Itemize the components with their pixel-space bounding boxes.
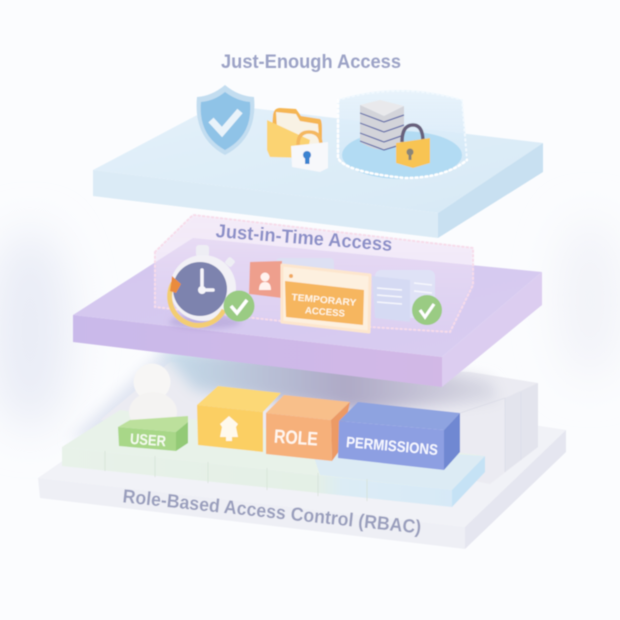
panel: role-based access control layer (38, 350, 566, 549)
icon: white lock (291, 132, 328, 172)
block: orange role (266, 395, 350, 461)
label: just-in-time access: Just-in-Time Access (215, 221, 393, 256)
label: access: ACCESS (304, 305, 345, 320)
blue slab (93, 104, 543, 238)
block: yellow role block (197, 386, 281, 452)
purple slab (73, 238, 542, 387)
label: temporary: TEMPORARY (291, 292, 357, 309)
icon: stopwatch (169, 245, 241, 329)
icon: server stack (360, 100, 404, 150)
icon: folder (267, 108, 322, 160)
label: just-enough access: Just-Enough Access (221, 52, 401, 73)
panel: just-in-time access layer (73, 215, 542, 387)
icon: shield (197, 85, 254, 155)
label: role-based access control: Role-Based Access Control (RBAC) (122, 486, 422, 539)
icon: user card (249, 258, 334, 298)
icon: gold lock (396, 125, 430, 168)
icon: documents (372, 270, 435, 322)
dotted boundary (155, 215, 473, 332)
label: role: ROLE (273, 426, 319, 451)
icon: database zone (337, 90, 468, 179)
user figure and block (118, 364, 188, 451)
floor blocks (62, 362, 538, 507)
icon: green check (412, 295, 442, 325)
label: user: USER (129, 431, 167, 450)
block: permissions (338, 402, 460, 470)
icon: house (220, 416, 238, 441)
card: temporary access (282, 265, 370, 332)
glow box (155, 215, 473, 332)
shadow under middle layer (160, 350, 500, 412)
icon: user figure (129, 364, 177, 432)
label: permissions: PERMISSIONS (345, 434, 439, 459)
panel: just-enough access layer (93, 52, 543, 238)
base slab (38, 372, 566, 549)
icon: green check (224, 290, 254, 322)
